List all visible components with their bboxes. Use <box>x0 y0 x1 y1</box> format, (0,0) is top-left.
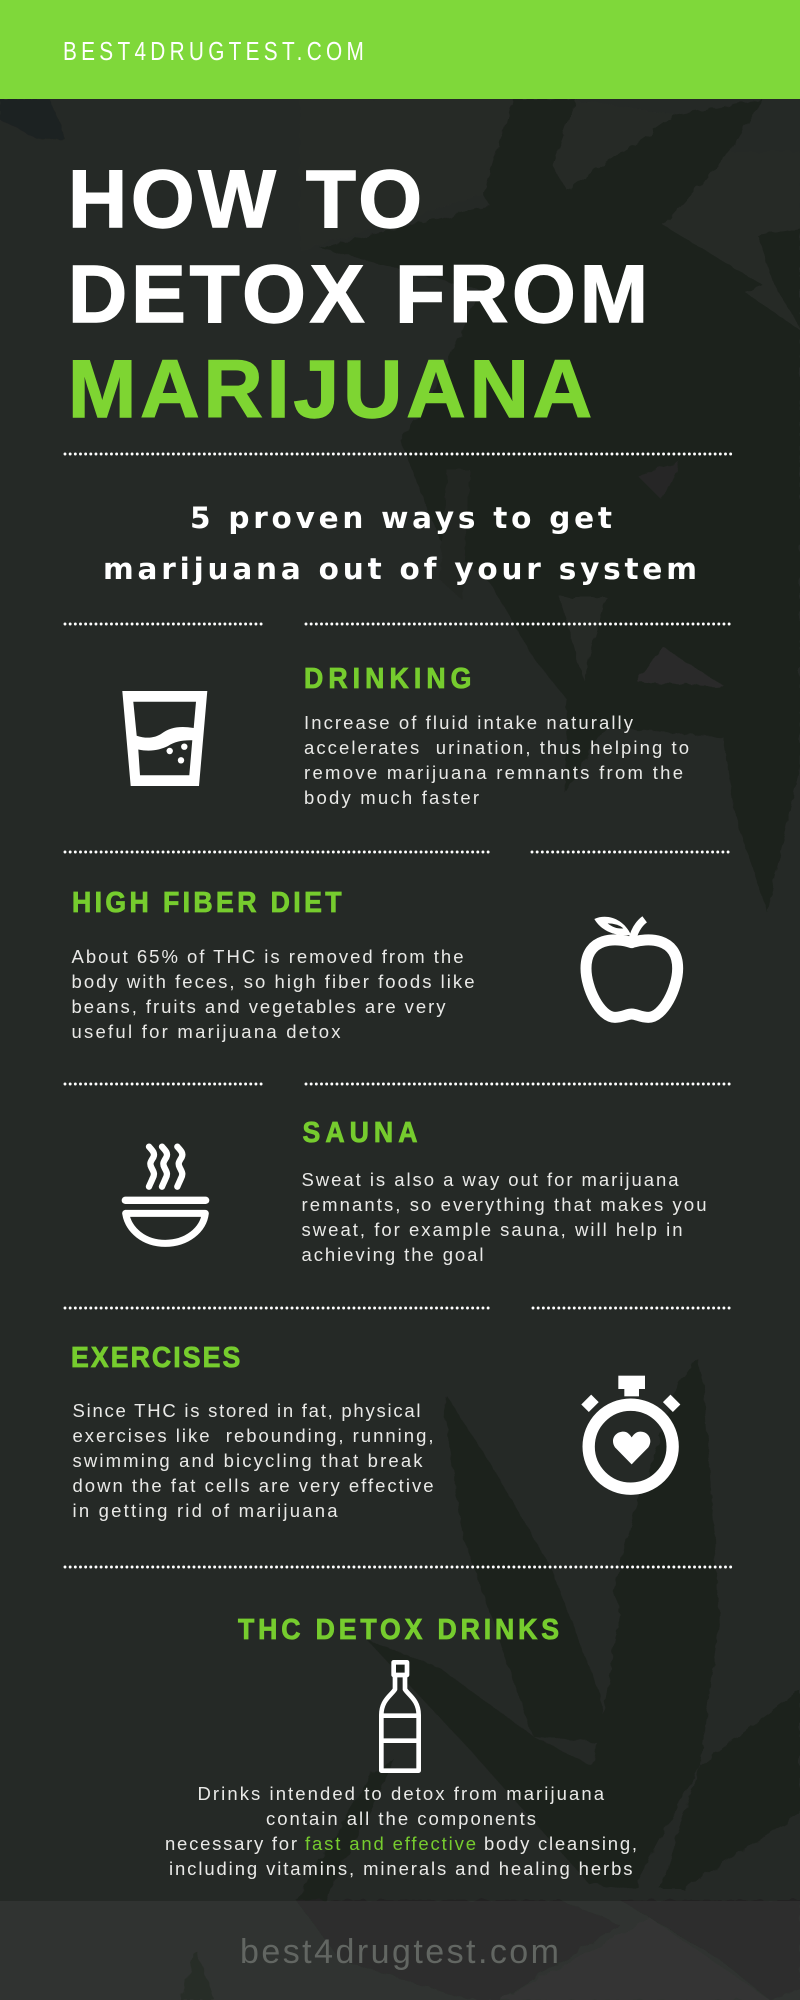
text: exercises <box>72 1400 434 1521</box>
section: drinking <box>122 662 689 808</box>
text: drinking: remove marijuana remnants from the <box>304 762 683 783</box>
heading: thc detox drinks: THC DETOX DRINKS <box>238 1613 559 1645</box>
title: HOW TO <box>68 154 422 245</box>
text: thc detox drinks <box>165 1783 637 1879</box>
text: sauna <box>302 1169 706 1265</box>
icon: bottle <box>381 1662 419 1771</box>
text: high fiber diet: body with feces, so high fiber foods like <box>72 971 474 992</box>
text: sauna: remnants, so everything that makes you <box>302 1194 706 1215</box>
top header bar <box>0 0 800 99</box>
text: thc detox drinks: necessary for <box>165 1833 297 1854</box>
text: high fiber diet: useful for marijuana detox <box>72 1021 341 1042</box>
text: exercises: swimming and bicycling that break <box>72 1450 423 1471</box>
text: high fiber diet: beans, fruits and vegetables are very <box>72 996 446 1017</box>
heading: sauna: SAUNA <box>302 1116 417 1148</box>
text: sauna: achieving the goal <box>302 1244 484 1265</box>
title: DETOX FROM <box>68 249 648 340</box>
footer url: best4drugtest.com <box>240 1933 559 1971</box>
title: MARIJUANA <box>68 344 592 435</box>
subtitle: marijuana out of your system <box>103 552 697 586</box>
text: drinking <box>304 712 689 808</box>
text: exercises: in getting rid of marijuana <box>72 1500 338 1521</box>
text: drinking: body much faster <box>304 787 479 808</box>
icon: steaming bowl <box>125 1147 206 1243</box>
section: exercises <box>71 1341 680 1521</box>
heading: drinking: DRINKING <box>304 662 471 694</box>
text: exercises: Since THC is stored in fat, physical <box>72 1400 420 1421</box>
icon: glass of water <box>122 691 207 786</box>
text: sauna: Sweat is also a way out for marijuana <box>302 1169 679 1190</box>
text: exercises: exercises like rebounding, running, <box>72 1425 434 1446</box>
section: thc detox drinks <box>165 1613 637 1879</box>
subtitle: 5 proven ways to get <box>190 501 612 535</box>
brand name: BEST4DRUGTEST.COM <box>63 37 364 66</box>
heading: high fiber diet: HIGH FIBER DIET <box>72 886 342 918</box>
text: drinking: Increase of fluid intake naturally <box>304 712 634 733</box>
text: drinking: accelerates urination, thus helping to <box>304 737 689 758</box>
icon: apple <box>586 917 678 1017</box>
text: thc detox drinks: body cleansing, <box>484 1833 637 1854</box>
section: high fiber diet <box>72 886 678 1042</box>
footer band <box>0 1901 800 2000</box>
text: exercises: down the fat cells are very effective <box>72 1475 434 1496</box>
text: high fiber diet <box>72 946 474 1042</box>
text: sauna: sweat, for example sauna, will help in <box>302 1219 682 1240</box>
text: thc detox drinks: Drinks intended to detox from marijuana <box>198 1783 605 1804</box>
heading: exercises: EXERCISES <box>71 1341 240 1373</box>
text: thc detox drinks: including vitamins, minerals and healing herbs <box>169 1858 632 1879</box>
subtitle <box>103 501 697 586</box>
icon: stopwatch with heart <box>581 1376 680 1489</box>
text: high fiber diet: About 65% of THC is removed from the <box>72 946 464 967</box>
title <box>68 154 648 435</box>
text: thc detox drinks: contain all the components <box>266 1808 536 1829</box>
section: sauna <box>125 1116 706 1265</box>
text: thc detox drinks: fast and effective <box>305 1833 476 1854</box>
